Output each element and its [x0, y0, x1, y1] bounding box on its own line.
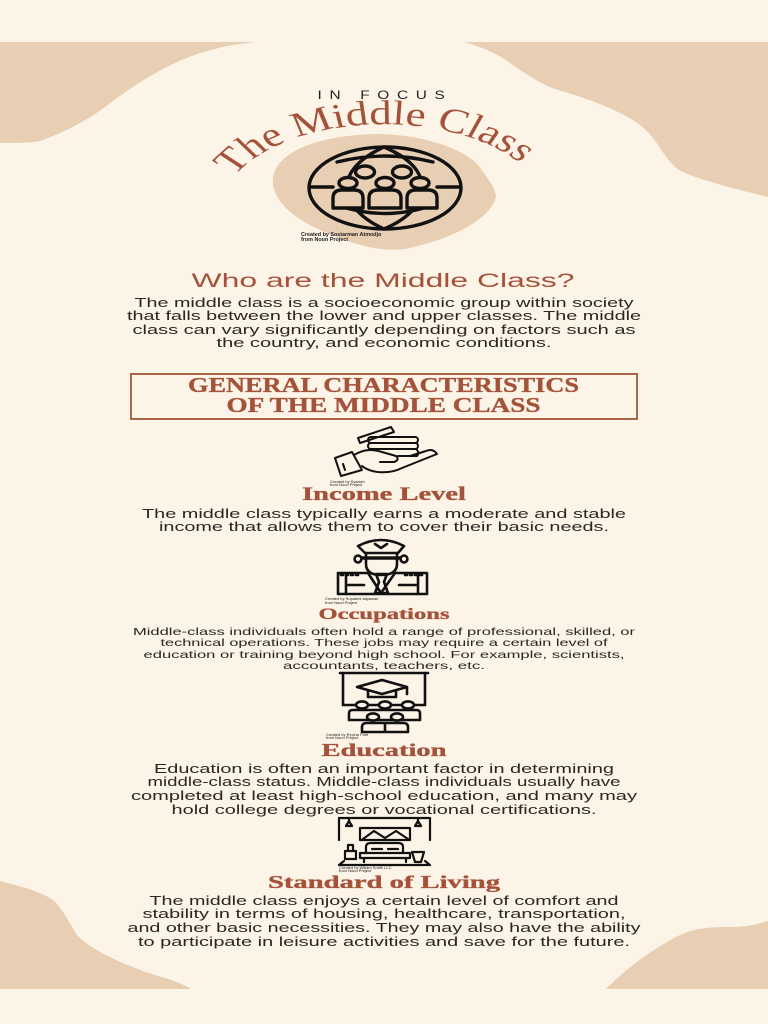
text: standard of living: The middle class enjoys a certain level of comfort and	[150, 893, 618, 908]
intro text: class can vary significantly depending on factors such as	[132, 322, 636, 337]
icon credit: officer: Created by Supalerk laipawan	[325, 596, 378, 601]
text: education: hold college degrees or vocational certifications.	[172, 802, 596, 817]
text: standard of living: stability in terms of housing, healthcare, transportation,	[142, 906, 626, 921]
icon credit: graduation	[326, 732, 368, 740]
text: standard of living: and other basic necessities. They may also have the ability	[128, 920, 641, 935]
title: curved: The Middle Class	[212, 100, 532, 172]
icon credit: bedroom: from Noun Project	[339, 868, 372, 873]
icon credit: globe: from Noun Project	[301, 237, 348, 243]
text: occupations: Middle-class individuals often hold a range of professional, skilled, or	[133, 626, 636, 638]
intro text: The middle class is a socioeconomic group within society	[134, 295, 634, 310]
icon credit: globe: Created by Sostarman Atmodjo	[301, 232, 382, 238]
panel: general characteristics banner: OF THE MIDDLE CLASS	[226, 393, 540, 417]
icon: officer	[338, 540, 427, 594]
heading: standard of living: Standard of Living	[268, 872, 500, 892]
text: education: middle-class status. Middle-class individuals usually have	[148, 774, 620, 789]
panel: general characteristics banner: GENERAL CHARACTERISTICS	[188, 373, 579, 397]
heading: income level: Income Level	[302, 485, 466, 505]
icon credit: hand	[330, 479, 365, 487]
text: education: Education is often an important factor in determining	[154, 761, 614, 776]
text: education	[131, 761, 638, 817]
text: occupations: accountants, teachers, etc.	[283, 660, 485, 672]
panel: general characteristics banner	[131, 373, 637, 419]
text: standard of living	[128, 893, 641, 949]
icon credit: bedroom	[339, 865, 392, 873]
intro text: that falls between the lower and upper classes. The middle	[127, 308, 641, 323]
eyebrow: in focus: IN FOCUS	[318, 88, 452, 102]
text: income level: The middle class typically earns a moderate and stable	[142, 506, 626, 521]
blob: top left	[0, 42, 256, 143]
text: income level	[142, 506, 626, 534]
icon credit: graduation: from Noun Project	[326, 735, 359, 740]
blob: bottom right	[606, 921, 768, 989]
icon credit: globe	[301, 232, 382, 243]
icon: graduation classroom	[340, 673, 428, 732]
icon credit: officer	[325, 596, 378, 605]
text: income level: income that allows them to cover their basic needs.	[159, 519, 609, 534]
text: occupations: education or training beyond high school. For example, scientists,	[144, 649, 624, 661]
heading: education: Education	[322, 740, 446, 760]
heading: occupations: Occupations	[318, 606, 450, 623]
text: occupations	[133, 626, 636, 672]
icon: bedroom	[339, 818, 430, 865]
icon credit: officer: from Noun Project	[325, 600, 358, 605]
text: education: completed at least high-school education, and many may	[131, 788, 638, 803]
icon: globe with people	[309, 147, 461, 229]
text: standard of living: to participate in leisure activities and save for the future.	[138, 934, 630, 949]
text: occupations: technical operations. These jobs may require a certain level of	[160, 637, 608, 649]
intro text: the country, and economic conditions.	[216, 335, 552, 350]
heading: who are the middle class: Who are the Middle Class?	[192, 271, 574, 292]
icon credit: hand: from Noun Project	[330, 482, 363, 487]
icon credit: hand: Created by Syarrah	[330, 479, 365, 484]
intro text	[127, 295, 641, 350]
blob behind globe icon	[273, 134, 496, 250]
blob: bottom left	[0, 881, 191, 989]
icon: hand holding money	[335, 427, 437, 476]
icon credit: bedroom: Created by Wiliam Smith LLC	[339, 865, 392, 870]
icon credit: graduation: Created by Ryvina Putri	[326, 732, 368, 737]
blob: top right	[465, 42, 768, 197]
